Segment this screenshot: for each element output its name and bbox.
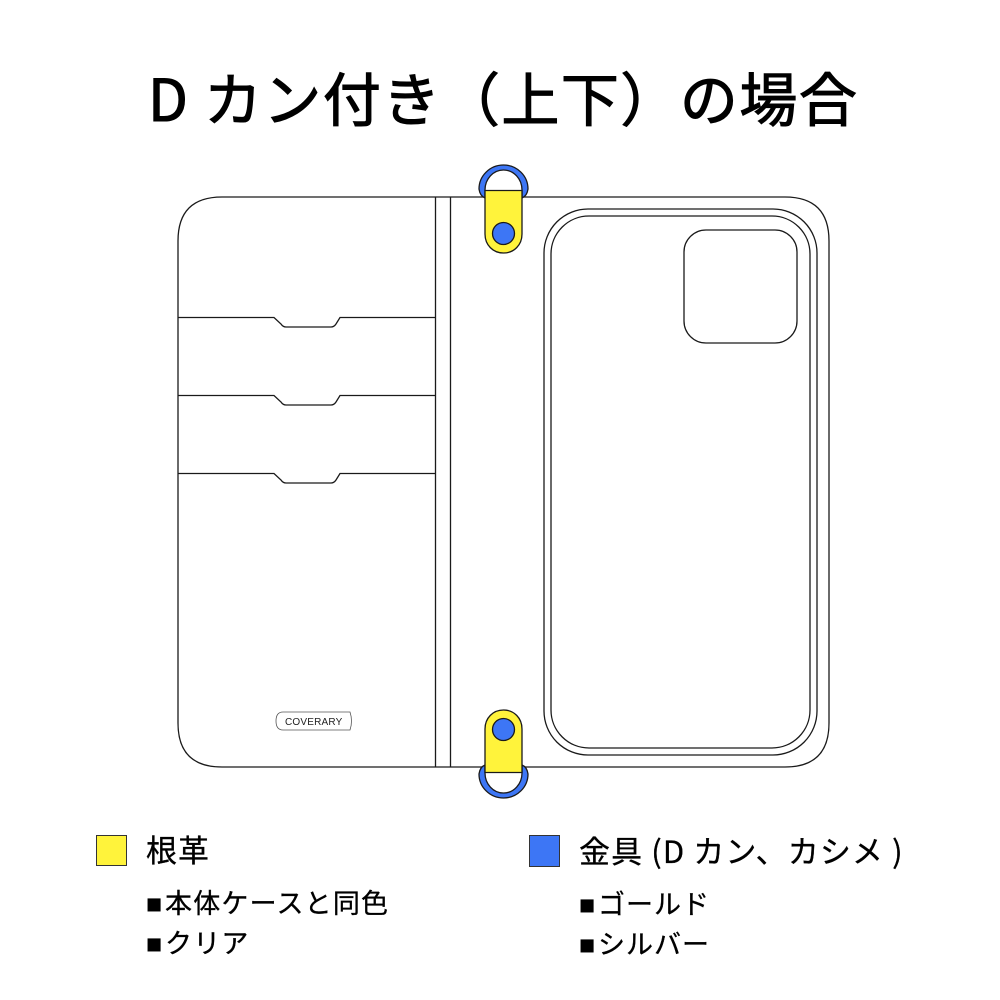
phone shell bbox=[544, 209, 817, 755]
legend list: hardware colors: シルバー bbox=[598, 923, 710, 962]
legend swatch: blue bbox=[529, 835, 560, 867]
top D-ring and strap bbox=[479, 165, 528, 253]
logo: COVERARY: COVERARY bbox=[285, 717, 343, 728]
legend heading: leather: 根革 bbox=[146, 826, 210, 871]
case outline bbox=[178, 197, 829, 767]
legend list: leather colors: クリア bbox=[165, 922, 250, 961]
legend list: leather colors: ■ bbox=[146, 889, 162, 919]
bottom D-ring and strap bbox=[479, 710, 528, 798]
legend list: leather colors: 本体ケースと同色 bbox=[165, 882, 389, 921]
legend list: hardware colors: ゴールド bbox=[598, 883, 710, 922]
legend list: hardware colors: ■ bbox=[579, 890, 595, 920]
legend list: hardware colors: ■ bbox=[579, 930, 595, 960]
camera cutout bbox=[684, 230, 797, 343]
logo: COVERARY bbox=[276, 712, 352, 730]
legend list: hardware colors bbox=[579, 883, 710, 962]
title: D カン付き（上下）の場合 bbox=[148, 54, 858, 138]
legend heading: hardware: 金具 (D カン、カシメ ) bbox=[579, 827, 904, 872]
legend list: leather colors: ■ bbox=[146, 929, 162, 959]
legend list: leather colors bbox=[146, 882, 389, 961]
legend swatch: yellow bbox=[96, 835, 127, 866]
card slots bbox=[178, 318, 435, 483]
